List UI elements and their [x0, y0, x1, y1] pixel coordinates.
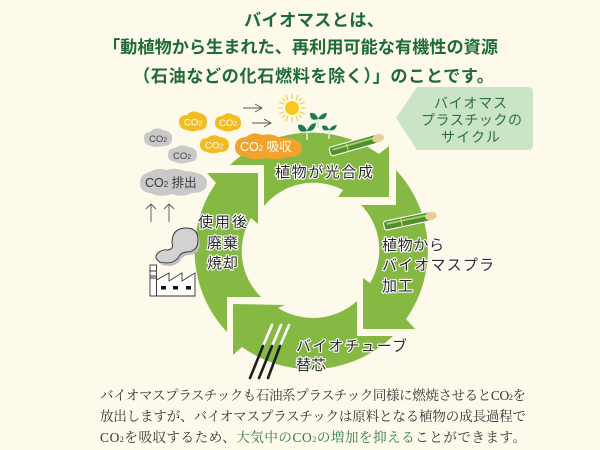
cloud: CO2 yellow 2	[215, 113, 241, 132]
label: processing	[382, 237, 494, 295]
label: bio tube refill: バイオチューブ	[296, 337, 407, 355]
body text	[100, 387, 526, 445]
icon: sugarcane top	[329, 132, 385, 156]
cloud: CO2 yellow 3	[200, 135, 229, 154]
panel: cycle title: サイクル	[441, 129, 500, 145]
cloud: CO2 yellow 2: CO2	[219, 118, 237, 129]
body text: CO2を吸収するため、大気中のCO2の増加を抑えることができます。	[100, 429, 526, 445]
icon: sun	[278, 94, 306, 122]
panel: cycle title: バイオマス	[434, 95, 507, 111]
title	[103, 10, 498, 86]
title: （石油などの化石燃料を除く）」のことです。	[133, 66, 494, 86]
cloud: CO2 gray 2	[168, 145, 197, 164]
cloud: CO2 absorption	[235, 133, 302, 159]
icon: seedlings	[298, 113, 337, 140]
icon: smoke	[156, 228, 200, 266]
label: processing: 植物から	[382, 237, 444, 254]
label: after use disposal	[198, 214, 247, 272]
cloud: CO2 gray 2: CO2	[173, 151, 191, 162]
body text: バイオマスプラスチックも石油系プラスチック同様に燃焼させるとCO2を	[100, 387, 526, 403]
arrow: photosynthesis segment	[230, 133, 389, 206]
body text: 放出しますが、バイオマスプラスチックは原料となる植物の成長過程で	[100, 408, 526, 424]
arrow: disposal segment	[195, 173, 261, 332]
label: photosynthesis: 植物が光合成	[275, 164, 373, 181]
title: バイオマスとは、	[244, 10, 384, 30]
cloud: CO2 emission	[140, 169, 207, 196]
panel: cycle title: プラスチックの	[421, 112, 522, 128]
arrow: processing segment	[361, 170, 428, 329]
icon: up arrows	[146, 204, 174, 222]
cloud: CO2 yellow 1	[179, 111, 207, 132]
label: processing: バイオマスプラ	[382, 257, 494, 274]
label: processing: 加工	[382, 278, 413, 295]
cloud: CO2 yellow 1: CO2	[184, 118, 202, 128]
cloud: CO2 gray 1: CO2	[149, 134, 167, 145]
label: after use disposal: 焼却	[207, 255, 238, 272]
panel: cycle title	[396, 87, 533, 150]
cloud: CO2 absorption: CO2 吸収	[240, 140, 292, 154]
icon: bio tubes	[250, 325, 289, 378]
icon: factory	[150, 265, 195, 296]
cloud: CO2 gray 1	[144, 128, 172, 147]
label: bio tube refill: 替芯	[296, 357, 326, 374]
cloud: CO2 emission: CO2 排出	[145, 176, 197, 190]
arrow: tube segment	[233, 301, 393, 369]
icon: arrows toward sun	[243, 104, 271, 127]
title: 「動植物から生まれた、再利用可能な有機性の資源	[103, 37, 498, 57]
cloud: CO2 yellow 3: CO2	[205, 140, 223, 152]
label: after use disposal: 廃棄	[207, 235, 238, 252]
label: after use disposal: 使用後	[198, 214, 247, 231]
icon: sugarcane right	[383, 210, 438, 230]
label: bio tube refill	[296, 337, 407, 374]
cycle ring arrows	[195, 133, 428, 369]
